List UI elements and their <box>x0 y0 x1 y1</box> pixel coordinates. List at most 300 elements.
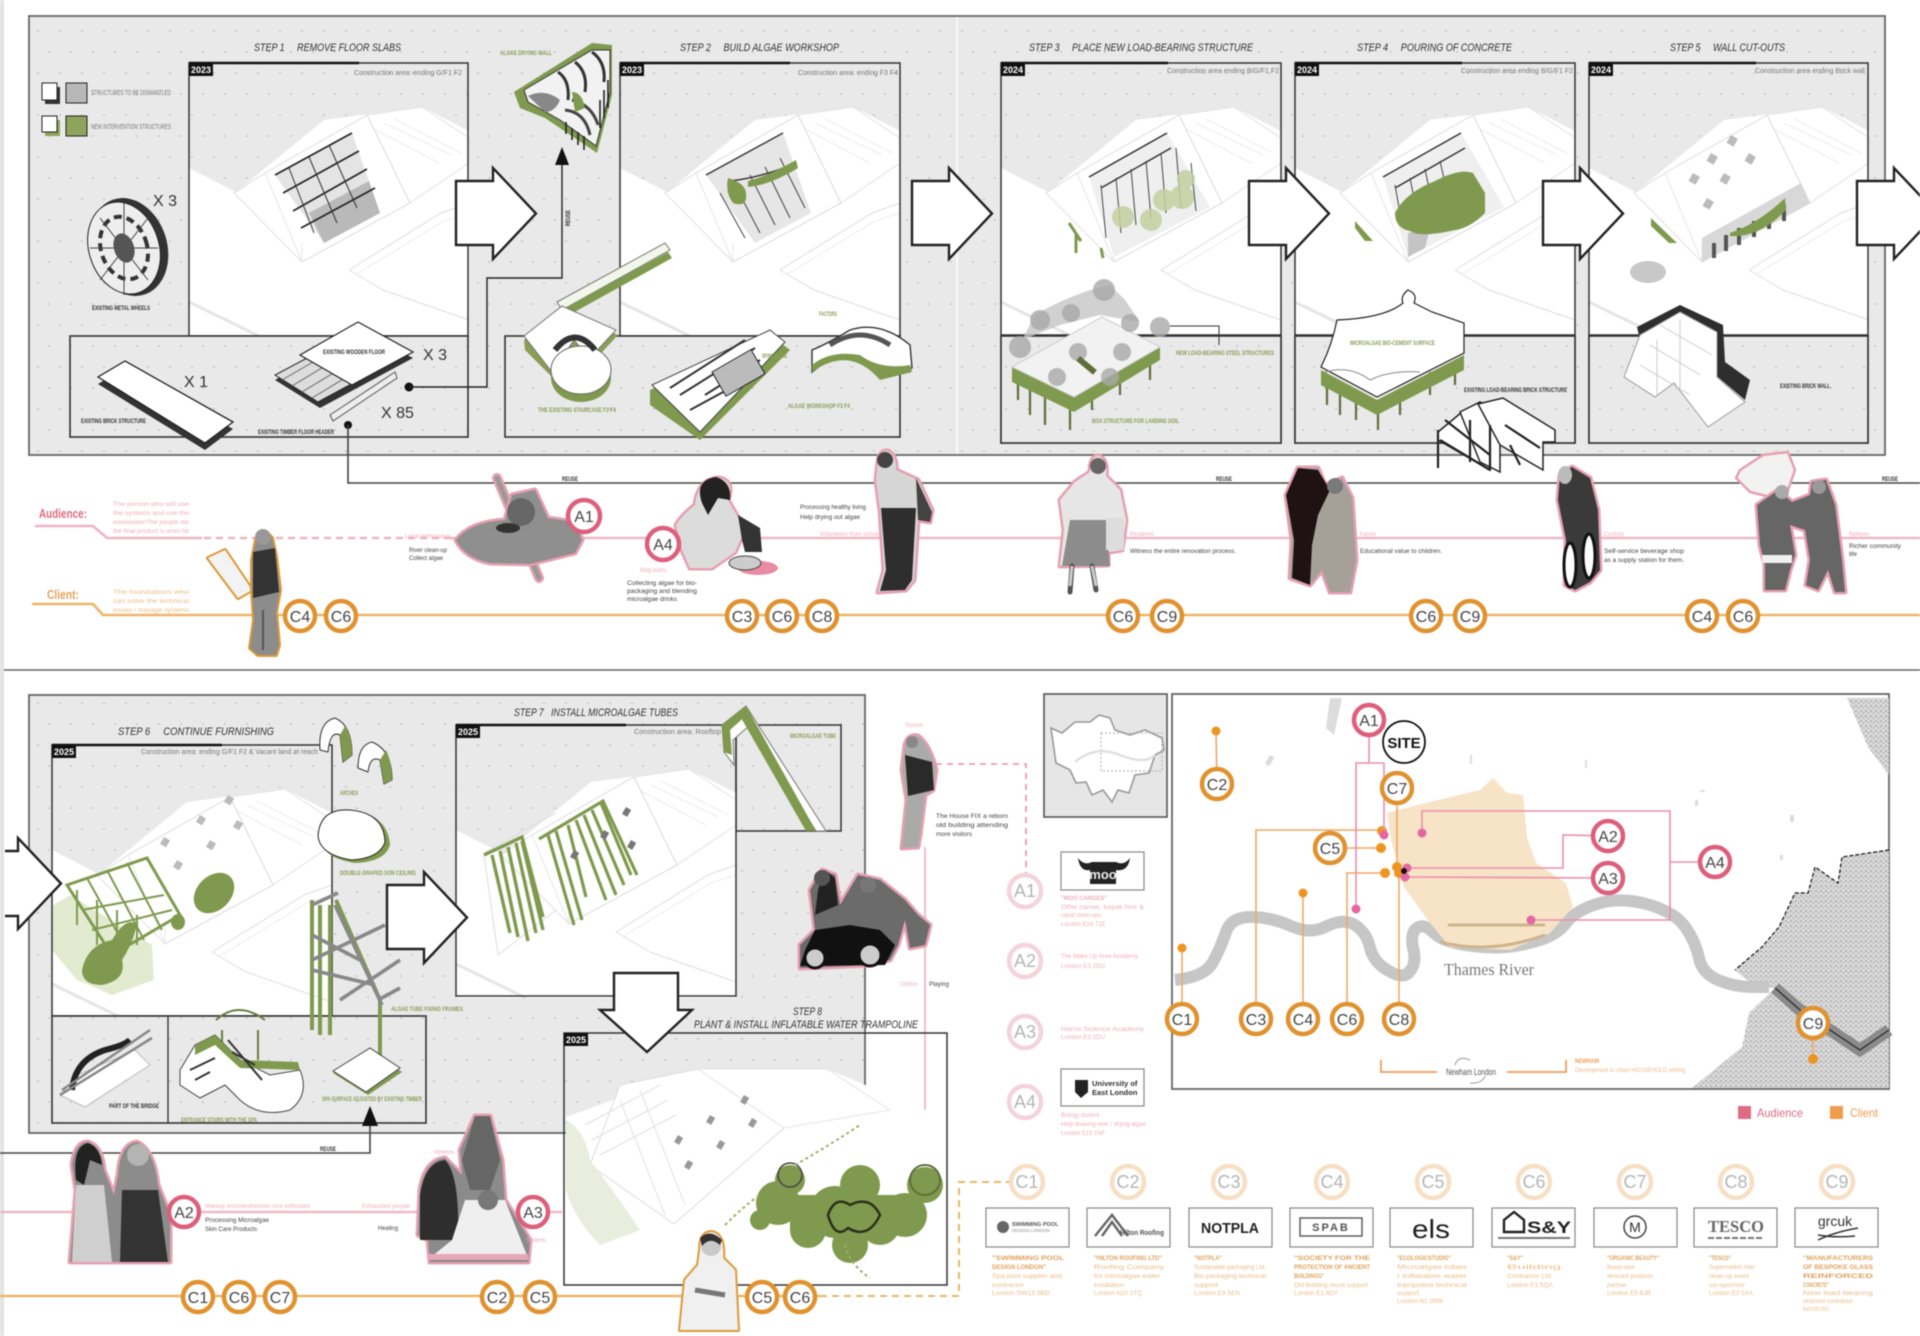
step 7 frame and building: 2025 <box>458 727 478 737</box>
figure: client woman <box>680 1232 738 1330</box>
kayaker note <box>405 533 452 562</box>
reuse connector to drying wall: REUSE <box>565 210 572 226</box>
step 6 frame and building <box>52 745 332 1018</box>
existing brick wall: EXISTING BRICK WALL <box>1780 383 1830 390</box>
reuse line to step 6: REUSE <box>320 1146 336 1153</box>
elderly note: life <box>1849 551 1857 558</box>
arches <box>320 718 392 797</box>
exhausted people note <box>362 1149 547 1244</box>
bridge stairs: THE EXISTING STAIRCASE F3 F4 <box>538 407 616 414</box>
C1 entry: "SWIMMING POOL <box>992 1255 1064 1262</box>
C7 entry: London E5 8JR <box>1607 1290 1651 1297</box>
Newham London bracket: Development in urban HOUSEHOLD setting <box>1575 1067 1685 1074</box>
map markers <box>1167 705 1828 1038</box>
arrow: step 6 to 7 <box>387 872 467 963</box>
C2 entry: London N20 1TQ <box>1094 1290 1142 1297</box>
onlooker note: Residents <box>1130 531 1155 538</box>
biology student note: Collecting algae for bio- <box>627 580 697 587</box>
client markers, lower row: C7 <box>270 1290 290 1307</box>
C5 entry: trampoline technical <box>1397 1282 1468 1289</box>
A4 entry: University of <box>1092 1079 1138 1088</box>
audience line: Audience: <box>39 506 87 521</box>
A1 entry: canal clean-ups <box>1061 912 1102 919</box>
backpack man note: Volunteers from school <box>820 531 880 538</box>
step 1 heading: STEP 1 REMOVE FLOOR SLABS <box>254 42 402 54</box>
algae drying wall <box>500 43 612 153</box>
figure: family embrace <box>1286 468 1356 592</box>
client line: issues / manage systems <box>113 607 190 614</box>
Newham London bracket: Newham London <box>1446 1067 1496 1078</box>
Thames river <box>1175 900 1769 987</box>
microalgae bio-cement surface <box>1321 290 1464 430</box>
step 2 frame and building: 2023 <box>622 65 642 75</box>
C8 entry <box>1694 1166 1777 1297</box>
C7 entry: M <box>1629 1219 1641 1235</box>
audience line: wastewater/The people ate <box>112 519 189 526</box>
C4 entry: SPAB <box>1312 1222 1350 1234</box>
entrance stairs <box>180 1010 303 1124</box>
spa surface square <box>322 1048 422 1103</box>
exhausted people note: Exhausted people <box>362 1203 410 1210</box>
client line, lower <box>0 1182 1010 1296</box>
C2 entry: installation <box>1094 1282 1124 1289</box>
lower panel: steps 6 and 7 <box>5 695 865 1133</box>
map markers: C8 <box>1389 1012 1409 1029</box>
step 3 frame and building: 2024 <box>1003 65 1023 75</box>
hatched neighbouring boroughs <box>1692 698 1889 1088</box>
marker A1 <box>568 500 600 532</box>
dome <box>318 810 416 877</box>
C8 entry: clean-up event <box>1709 1273 1749 1280</box>
C5 entry: Microalgae tubes <box>1397 1264 1468 1271</box>
step 2 lower box <box>505 336 900 437</box>
A1 entry: Offer canoe, kayak hire & <box>1061 904 1145 911</box>
step 3 heading: STEP 3 PLACE NEW LOAD-BEARING STRUCTURE <box>1029 42 1254 54</box>
C6 entry: C6 <box>1522 1172 1546 1192</box>
step 5 heading: STEP 5 WALL CUT-OUTS <box>1670 42 1786 54</box>
figure: two women with skincare <box>70 1142 170 1262</box>
map markers: A2 <box>1598 829 1618 846</box>
C5 entry: els <box>1412 1214 1450 1244</box>
backpack man note: Help drying out algae <box>800 514 860 521</box>
marker A2 <box>169 1197 199 1227</box>
river label: Thames River <box>1444 960 1534 979</box>
metal wheel <box>76 188 181 312</box>
A3 entry <box>1009 1016 1145 1048</box>
map markers: C9 <box>1803 1016 1823 1033</box>
brick strip: X 1 <box>184 374 208 391</box>
A3 entry: Harris Science Academy <box>1061 1026 1145 1033</box>
tourist note and dashed link: Tourism <box>905 722 923 729</box>
step 5 frame and building: Construction area ending Brick wall <box>1755 68 1865 75</box>
client markers, lower row: C1 <box>188 1290 208 1307</box>
audience leader lines <box>1352 720 1715 924</box>
client markers, first row: C4 <box>290 609 310 626</box>
A4 entry: Help drawing river / drying algae <box>1061 1121 1146 1128</box>
new steel structure slab with trees: NEW LOAD-BEARING STEEL STRUCTURES <box>1176 350 1274 357</box>
reuse connector to drying wall <box>404 147 572 392</box>
existing load-bearing brick structure callout <box>1438 387 1567 472</box>
figure: elderly couple with umbrella <box>1736 452 1845 592</box>
client markers, first row: C9 <box>1460 609 1480 626</box>
arrow: step 4 to 5 <box>1543 168 1623 259</box>
map markers: A4 <box>1705 855 1725 872</box>
metal wheel: EXISTING METAL WHEELS <box>92 305 150 312</box>
C1 entry: contractor <box>992 1282 1025 1289</box>
step 2 frame and building <box>620 63 900 336</box>
marker A4: A4 <box>653 537 673 554</box>
C3 entry: Bio packaging technical <box>1194 1273 1267 1280</box>
brick strip: EXISTING BRICK STRUCTURE <box>81 418 146 425</box>
cyclist note: as a supply station for them. <box>1604 557 1684 564</box>
C3 entry: NOTPLA <box>1201 1220 1259 1237</box>
figure: biology student at microscope <box>676 477 778 575</box>
A2 entry: A2 <box>1014 951 1036 971</box>
C5 entry <box>1390 1166 1473 1305</box>
step 4 frame and building <box>1295 63 1575 443</box>
exhausted people note: Healing <box>378 1225 398 1232</box>
C1 entry: Spa pool supplier and <box>992 1273 1062 1280</box>
site map <box>1167 694 1889 1089</box>
tourist vertical line <box>924 847 926 1225</box>
client line: can solve the technical <box>113 598 190 605</box>
figure: man with backpack <box>876 451 932 592</box>
wooden floor: EXISTING WOODEN FLOOR <box>323 349 385 356</box>
C2 entry: C2 <box>1116 1172 1140 1192</box>
audience line, lower <box>0 1211 562 1213</box>
top timeline: audience <box>32 421 1920 655</box>
figure: woman with shopping bags <box>1060 456 1126 592</box>
C6 entry <box>1492 1166 1575 1289</box>
C9 entry: Kent DA2 6XS <box>1803 1306 1829 1313</box>
reuse line <box>344 421 1920 483</box>
step 8 heading <box>694 1006 919 1031</box>
arrow: step 3 to 4 <box>1249 168 1329 259</box>
C3 entry <box>1189 1166 1272 1297</box>
backpack man note <box>800 504 880 538</box>
marker A3: A3 <box>523 1205 543 1222</box>
C9 entry: REINFORCED <box>1803 1273 1873 1280</box>
client markers, lower row: C6 <box>790 1290 810 1307</box>
biology student note: packaging and blending <box>627 588 697 595</box>
step 1 frame and building: 2023 <box>191 65 211 75</box>
A2 entry: London E3 2DU <box>1061 963 1105 970</box>
C1 entry <box>986 1166 1069 1297</box>
A4 entry: Biology student <box>1061 1112 1099 1119</box>
client markers, first row: C6 <box>1416 609 1436 626</box>
C7 entry: Beauty salon <box>1607 1264 1635 1271</box>
step 6 heading: STEP 6 CONTINUE FURNISHING <box>118 726 274 738</box>
new steel structure slab with trees <box>1009 279 1274 430</box>
skincare note <box>205 1203 310 1233</box>
step 4 heading: STEP 4 POURING OF CONCRETE <box>1357 42 1513 54</box>
wooden floor <box>258 322 447 436</box>
step 3 <box>1001 42 1281 443</box>
material legend <box>42 83 171 136</box>
C9 entry: OF BESPOKE GLASS <box>1803 1264 1874 1271</box>
skincare note: Makeup artist/aesthetician core enthusiast <box>205 1203 310 1210</box>
client line <box>32 587 1920 615</box>
C1 entry: C1 <box>1015 1172 1039 1192</box>
A4 entry: East London <box>1092 1088 1138 1097</box>
step 8 frame and building: 2025 <box>566 1035 586 1045</box>
client markers, first row: C6 <box>331 609 351 626</box>
arrow: into step 6 <box>5 838 61 929</box>
C4 entry: BUILDINGS" <box>1294 1273 1324 1280</box>
algae tube fixing frames <box>312 893 463 1068</box>
A4 entry: London E15 1NF <box>1061 1130 1105 1137</box>
map markers: C1 <box>1172 1012 1192 1029</box>
client markers, lower row: C5 <box>530 1290 550 1307</box>
map markers: A1 <box>1359 713 1379 730</box>
step 4 <box>1295 42 1575 443</box>
client leader lines <box>1178 726 1818 1064</box>
A4 entry <box>1009 1069 1146 1137</box>
marker A2: A2 <box>174 1205 194 1222</box>
C5 entry: support <box>1397 1290 1419 1297</box>
existing brick wall <box>1624 305 1830 427</box>
client markers, first row: C3 <box>732 609 752 626</box>
arrow: step 7 down to step 8 <box>600 973 692 1052</box>
C9 entry: structure contractor <box>1803 1298 1854 1305</box>
arrow: step 1 to 2 <box>456 168 536 259</box>
skincare note: Processing Microalgae <box>205 1217 269 1224</box>
client line: Client: <box>47 587 79 602</box>
kayaker note: Collect algae <box>409 555 443 562</box>
tourist note and dashed link: old building attending <box>936 822 1008 829</box>
step 1 lower box <box>70 336 468 437</box>
kayaker note: River clean-up <box>409 547 447 554</box>
C9 entry: C9 <box>1825 1172 1849 1192</box>
inflatable water trampoline <box>725 1125 943 1278</box>
faint map detail <box>1265 698 1794 860</box>
C5 entry: "ECOLOGICSTUDIO" <box>1397 1255 1451 1262</box>
C2 entry: Hilton Roofing <box>1120 1230 1164 1237</box>
Newham borough <box>1387 778 1573 950</box>
C8 entry: "TESCO" <box>1709 1255 1731 1262</box>
C2 entry: Roofing Company <box>1094 1264 1165 1271</box>
skincare note: Skin Care Products <box>205 1226 258 1233</box>
A1 entry: moo <box>1089 867 1117 882</box>
client markers, first row: C6 <box>772 609 792 626</box>
C9 entry: New load-bearing <box>1803 1290 1874 1297</box>
audience directory <box>1009 852 1146 1137</box>
reuse line: REUSE <box>562 476 578 483</box>
client markers, lower row: C2 <box>487 1290 507 1307</box>
C2 entry: for microalgae water <box>1094 1273 1161 1280</box>
family note <box>1360 531 1442 555</box>
C4 entry: Old building reuse support <box>1294 1282 1368 1289</box>
map legend <box>1738 1106 1879 1120</box>
algae workshop: DRYING MACHINE <box>762 353 787 360</box>
algae workshop: ALGAE WORKSHOP F3 F4 <box>788 403 850 410</box>
figure: tourist <box>902 736 936 848</box>
tourist note and dashed link: more visitors <box>936 831 973 838</box>
step 1 frame and building: Construction area: ending G/F1 F2 <box>354 70 462 77</box>
marker A4 <box>647 528 679 560</box>
C6 entry: "S&Y" <box>1507 1255 1523 1262</box>
algae tube fixing frames: ALGAE TUBE FIXING FRAMES <box>391 1006 463 1013</box>
Newham London bracket: NEWHAM <box>1575 1058 1599 1065</box>
biology student note <box>627 567 697 603</box>
entrance stairs: ENTRANCE STAIRS WITH THE SPA <box>181 1117 257 1124</box>
step 1 <box>70 42 469 450</box>
C9 entry: grcuk <box>1818 1213 1853 1229</box>
C4 entry: PROTECTION OF ANCIENT <box>1294 1264 1370 1271</box>
A1 entry: "MOO CANOES" <box>1061 895 1107 902</box>
A3 entry: London E3 2DU <box>1061 1034 1105 1041</box>
A1 entry: London E14 7JZ <box>1061 921 1105 928</box>
C8 entry: London E3 5XA <box>1709 1290 1754 1297</box>
marker A3 <box>518 1197 548 1227</box>
step 4 frame and building: 2024 <box>1297 65 1317 75</box>
C4 entry: London E1 6DY <box>1294 1290 1339 1297</box>
marker A1: A1 <box>574 509 594 526</box>
client markers, first row: C4 <box>1692 609 1712 626</box>
brick strip <box>81 361 233 450</box>
C2 entry <box>1087 1166 1170 1297</box>
biology student note: Biology students <box>640 567 666 574</box>
A2 entry <box>1009 945 1139 977</box>
cyclist note: Self-service beverage shop <box>1604 548 1684 555</box>
step 6 lower boxes <box>52 1016 426 1123</box>
wooden floor: X 3 <box>423 347 447 364</box>
microalgae tube <box>722 706 836 831</box>
step 8 <box>564 847 947 1285</box>
step 7 frame and building <box>456 725 736 998</box>
family note: Educational value to children. <box>1360 548 1442 555</box>
new steel structure slab with trees: BOX STRUCTURE FOR LANDING SOIL <box>1092 418 1179 425</box>
client markers, lower row: C5 <box>752 1290 772 1307</box>
C3 entry: London E9 5EN <box>1194 1290 1240 1297</box>
step 7 <box>456 706 841 998</box>
C7 entry: partner <box>1607 1282 1628 1289</box>
C1 entry: DESIGN LONDON" <box>992 1264 1046 1271</box>
C3 entry: "NOTPLA" <box>1194 1255 1222 1262</box>
C5 entry: C5 <box>1421 1172 1445 1192</box>
tourist note and dashed link: The House FIX a reborn <box>936 813 1008 820</box>
microalgae tube: MICROALGAE TUBE <box>790 733 836 740</box>
client markers, first row <box>285 601 1758 631</box>
C1 entry: DESIGN LONDON <box>1012 1228 1050 1233</box>
reuse line: REUSE <box>1882 476 1898 483</box>
figure: site worker with plan <box>208 529 280 655</box>
step 6 frame and building: Construction area: ending G/F1 F2 & Vacant land at reach <box>141 749 318 756</box>
step 7 heading: STEP 7 INSTALL MICROALGAE TUBES <box>514 707 679 719</box>
onlooker note: Witness the entire renovation process. <box>1130 548 1236 555</box>
step 8 heading: PLANT & INSTALL INFLATABLE WATER TRAMPOLINE <box>694 1019 919 1031</box>
C8 entry: TESCO <box>1708 1217 1764 1236</box>
backpack man note: Processing healthy living <box>800 504 866 511</box>
map markers: C4 <box>1293 1012 1313 1029</box>
A1 entry <box>1009 852 1145 928</box>
algae workshop: FACTORS <box>819 311 837 318</box>
figure: children on toy car: Playing <box>929 981 949 988</box>
arches: ARCHES <box>340 790 358 797</box>
map markers: C7 <box>1387 781 1407 798</box>
reuse line to step 6 <box>0 1106 378 1153</box>
audience line: The person who will use <box>113 501 189 508</box>
step 5 frame and building: 2024 <box>1591 65 1611 75</box>
step 2 <box>404 42 912 440</box>
C1 entry: SWIMMING POOL <box>1012 1222 1059 1228</box>
metal wheel: X 3 <box>153 193 177 210</box>
C9 entry: "MANUFACTURERS <box>1803 1255 1874 1262</box>
C7 entry: skincare products <box>1607 1273 1654 1280</box>
A1 entry: A1 <box>1014 881 1036 901</box>
lower timeline <box>0 1106 1010 1330</box>
client markers, first row: C9 <box>1157 609 1177 626</box>
C7 entry: "ORGANIC BEAUTY" <box>1607 1255 1659 1262</box>
step 6 frame and building: 2025 <box>54 747 74 757</box>
site marker <box>1383 721 1425 763</box>
map markers: C3 <box>1246 1012 1266 1029</box>
material legend: STRUCTURES TO BE DISMANTLED <box>91 90 171 97</box>
step 2 frame and building: Construction area: ending F3 F4 <box>798 70 898 77</box>
reuse line: REUSE <box>1216 476 1232 483</box>
figure: cyclist <box>1558 466 1600 590</box>
map markers: C2 <box>1207 777 1227 794</box>
top panel: steps 1 to 5 <box>29 16 1920 455</box>
C3 entry: Sustainable packaging Ltd. <box>1194 1264 1266 1271</box>
existing load-bearing brick structure callout: EXISTING LOAD-BEARING BRICK STRUCTURE <box>1464 387 1567 394</box>
figure: kayaker <box>456 478 582 578</box>
step 4 frame and building: Construction area ending B/G/F1 F2 <box>1461 68 1573 75</box>
elderly note <box>1849 531 1902 558</box>
C8 entry: C8 <box>1724 1172 1748 1192</box>
material legend: NEW INTERVENTION STRUCTURES <box>91 124 171 131</box>
client markers, first row: C6 <box>1733 609 1753 626</box>
audience line <box>35 501 1920 538</box>
wooden floor: X 85 <box>381 405 414 422</box>
step 7 frame and building: Construction area: Rooftop <box>634 729 721 736</box>
tourist note and dashed link <box>905 722 1026 873</box>
step 8 heading: STEP 8 <box>793 1006 823 1018</box>
map legend: Client <box>1850 1106 1879 1120</box>
C4 entry: "SOCIETY FOR THE <box>1294 1255 1371 1262</box>
algae workshop <box>650 311 912 440</box>
C6 entry: London E1 5QA <box>1507 1282 1554 1289</box>
cyclist note <box>1604 531 1684 564</box>
client markers, lower row: C6 <box>229 1290 249 1307</box>
C5 entry: London N1 2RW <box>1397 1298 1444 1305</box>
step 7 side box <box>736 725 841 831</box>
client markers, lower row <box>183 1282 815 1312</box>
A2 entry: The Make Up Area Academy <box>1061 953 1139 960</box>
left page edge strip <box>0 0 4 1336</box>
map markers: A3 <box>1598 871 1618 888</box>
step 5 frame and building <box>1589 63 1869 443</box>
client markers, first row: C6 <box>1113 609 1133 626</box>
elderly note: Retirees <box>1849 531 1870 538</box>
audience line: the systems and use the <box>113 510 189 517</box>
A3 entry: A3 <box>1014 1022 1036 1042</box>
C1 entry: London SW13 9BD <box>992 1290 1050 1297</box>
site marker: SITE <box>1387 735 1421 752</box>
figure: children on toy car <box>800 870 949 988</box>
kayaker note: Local enthusiasts <box>405 533 452 540</box>
step 3 frame and building: Construction area ending B/G/F1 F2 <box>1167 68 1279 75</box>
C7 entry <box>1594 1166 1677 1297</box>
bridge stairs <box>524 243 672 414</box>
dome: DOUBLE-SHAPED SUN CEILING <box>340 870 416 877</box>
C4 entry: C4 <box>1320 1172 1344 1192</box>
part of the bridge: PART OF THE BRIDGE <box>109 1103 159 1110</box>
cyclist note: Cyclists <box>1604 531 1625 538</box>
map legend: Audience <box>1757 1106 1803 1120</box>
C6 entry: S&Y <box>1527 1218 1572 1237</box>
Newham London bracket <box>1381 1058 1685 1083</box>
